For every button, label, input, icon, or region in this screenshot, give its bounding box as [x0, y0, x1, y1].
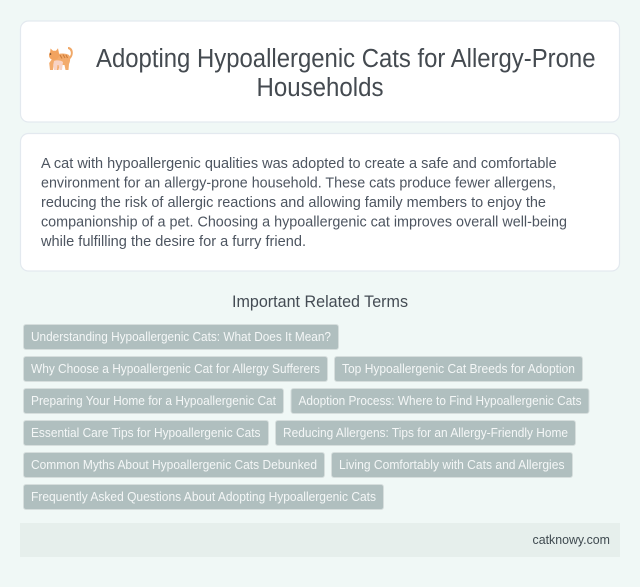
chip: essential care [24, 420, 268, 446]
chip: reducing allergens [276, 420, 576, 446]
chip: common myths: Common Myths About Hypoallergenic Cats Debunked [31, 458, 317, 472]
text block: description: companionship of a pet. Choosing a hypoallergenic cat improves overall well-being [41, 214, 567, 230]
chip: understanding [24, 324, 338, 350]
chip: faq: Frequently Asked Questions About Adopting Hypoallergenic Cats [31, 490, 376, 504]
chip: understanding: Understanding Hypoallergenic Cats: What Does It Mean? [31, 330, 331, 344]
chip: preparing home: Preparing Your Home for a Hypoallergenic Cat [31, 394, 276, 408]
title [96, 45, 596, 102]
chip: top breeds: Top Hypoallergenic Cat Breeds for Adoption [342, 362, 575, 376]
chip: why choose [24, 356, 328, 382]
chip: why choose: Why Choose a Hypoallergenic Cat for Allergy Sufferers [31, 362, 320, 376]
chip: living comfortably: Living Comfortably with Cats and Allergies [339, 458, 564, 472]
chip: preparing home [24, 388, 284, 414]
chip: living comfortably [332, 452, 572, 478]
chip: top breeds [334, 356, 582, 382]
heading: important related terms: Important Related Terms [232, 293, 408, 311]
text block: description: reducing the risk of allergic reactions and allowing family members to enjoy the [41, 194, 546, 211]
title: Adopting Hypoallergenic Cats for Allergy-Prone [96, 45, 596, 73]
chip: essential care: Essential Care Tips for Hypoallergenic Cats [31, 426, 260, 440]
footer bar [20, 523, 620, 557]
chip: common myths [24, 452, 324, 478]
panel: title card [20, 21, 620, 122]
panel: description card [20, 134, 620, 271]
title: Households [256, 74, 384, 102]
chip: reducing allergens: Reducing Allergens: Tips for an Allergy-Friendly Home [283, 426, 568, 440]
text block: description: environment for an allergy-prone household. These cats produce fewer allergens, [41, 174, 556, 192]
text block: description: while fulfilling the desire for a furry friend. [40, 233, 306, 250]
text block: description [40, 155, 567, 250]
chip: adoption process [291, 388, 589, 414]
text block: description: A cat with hypoallergenic qualities was adopted to create a safe and comfortable [41, 155, 557, 172]
footer text: site name: catknowy.com [532, 532, 610, 547]
chip group: related terms [24, 324, 589, 510]
chip: faq [24, 484, 384, 510]
icon: cat emoji [49, 47, 73, 70]
chip: adoption process: Adoption Process: Where to Find Hypoallergenic Cats [298, 394, 582, 408]
